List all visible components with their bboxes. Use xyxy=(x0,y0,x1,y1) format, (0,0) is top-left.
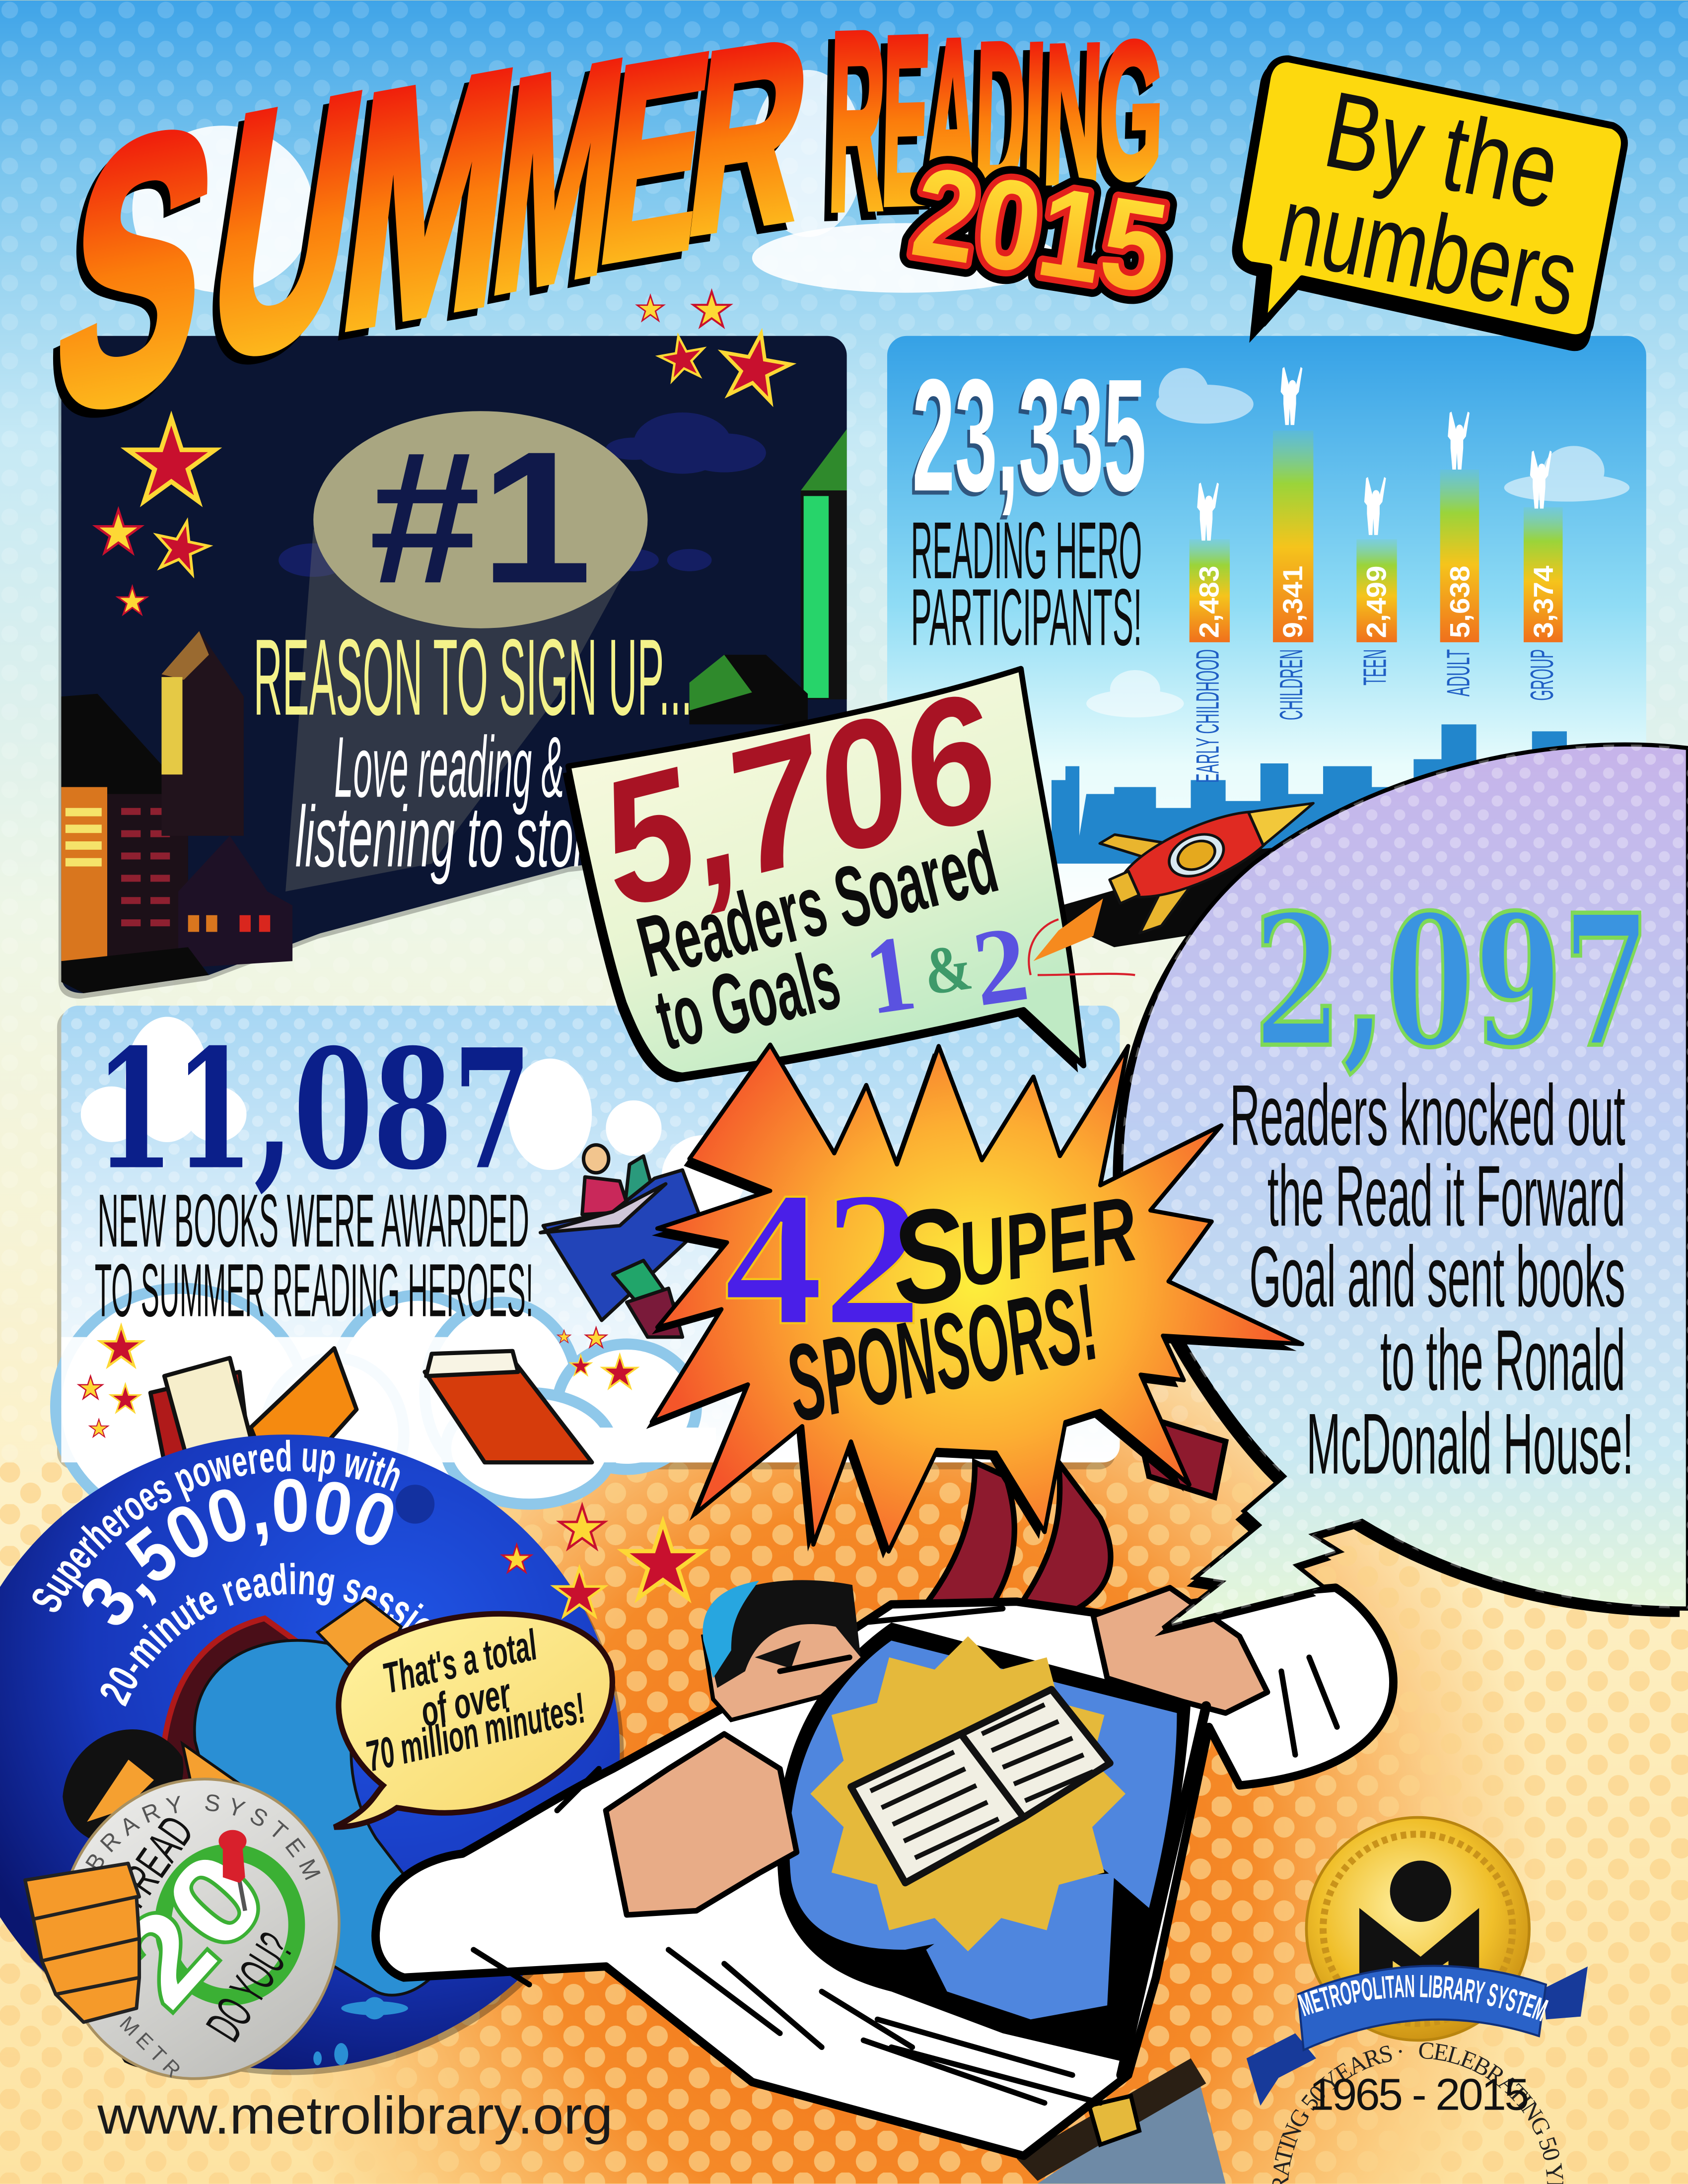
text: love reading xyxy=(295,719,643,885)
title: 2015: 2015 xyxy=(904,139,1177,320)
text: super xyxy=(882,1177,1143,1334)
stars xyxy=(502,1505,703,1616)
stat: 5,706: 5,706 xyxy=(580,655,1015,945)
bar chart xyxy=(1190,367,1563,783)
badge: I read 20 xyxy=(70,1777,341,2086)
text: 1 and 2: 2 xyxy=(966,903,1035,1029)
bar: adult: 5,638 xyxy=(1444,566,1476,638)
title: summer reading: M xyxy=(327,0,531,400)
bar: group: 3,374 xyxy=(1528,566,1559,638)
skyline xyxy=(1052,724,1646,864)
text: I read: I READ xyxy=(105,1807,204,1917)
title: summer reading: I xyxy=(1021,0,1048,231)
title shadow: N xyxy=(1034,11,1098,234)
callout: 2,097 readers xyxy=(1113,745,1688,1637)
icon: pin xyxy=(218,1830,247,1911)
hair and face xyxy=(703,1580,863,1720)
panel: participants xyxy=(887,336,1646,947)
panel: participants: 23,335 xyxy=(912,346,1146,525)
shirt xyxy=(375,1588,1393,2156)
illustration: cape xyxy=(891,1414,1226,1643)
illustration: flying hero xyxy=(64,1599,453,2069)
text: by the: By the xyxy=(1316,68,1569,232)
title: summer reading: G xyxy=(1096,1,1167,220)
illustration: rocket xyxy=(1029,755,1334,975)
title shadow: R xyxy=(669,0,815,298)
caption: new books xyxy=(95,1179,533,1333)
text: 1 and 2: & xyxy=(919,930,977,1009)
bar: group: GROUP xyxy=(1524,649,1560,701)
panel: new books: NEW BOOKS WERE AWARDED xyxy=(97,1179,529,1263)
icon: flying book with heroes xyxy=(540,1145,703,1337)
stars above panel xyxy=(637,291,795,404)
text: library system: LIBRARY SYSTEM xyxy=(85,1794,321,1880)
text: sponsors: SPONSORS! xyxy=(776,1261,1108,1445)
text: to goals: to Goals xyxy=(647,930,848,1068)
text: readers soared: Readers Soared xyxy=(629,814,1006,996)
panel: number one reason xyxy=(59,336,847,999)
illustration: blue reading circle xyxy=(0,737,723,2086)
icon: open book xyxy=(851,1689,1110,1883)
bar: teen: 2,499 xyxy=(1360,566,1392,638)
bar: group xyxy=(1524,451,1563,701)
logo: metropolitan library medal xyxy=(1247,1818,1588,2184)
bar: adult xyxy=(1440,411,1479,696)
stat: 42: 42 xyxy=(724,1152,922,1365)
chest emblem xyxy=(781,1607,1154,1980)
title shadow: A xyxy=(915,0,975,255)
panel: participants: 23,335 xyxy=(910,350,1143,529)
title: summer reading: N xyxy=(1041,2,1105,225)
title shadow: E xyxy=(872,0,925,263)
title shadow: E xyxy=(581,2,715,330)
callout: 70 million minutes: That's a total xyxy=(378,1621,542,1703)
text: readers knocked out xyxy=(1230,1067,1634,1492)
icon: stack of books xyxy=(150,1348,592,1462)
text: 1965 - 2015: 1965 - 2015 xyxy=(1309,2070,1529,2120)
icon: fist xyxy=(25,1863,140,2022)
title: summer reading: S xyxy=(35,46,237,492)
bar: early childhood: EARLY CHILDHOOD xyxy=(1190,649,1226,783)
title shadow xyxy=(28,0,1160,501)
ring xyxy=(163,1852,297,1997)
callout: 70 million minutes: 70 million minutes! xyxy=(362,1684,590,1780)
panel: participants: PARTICIPANTS! xyxy=(911,573,1142,663)
panel: new books: TO SUMMER READING HEROES! xyxy=(95,1249,533,1333)
spotlight xyxy=(313,411,647,628)
title shadow: M xyxy=(473,2,631,366)
spotlight beam xyxy=(285,530,640,891)
title: 2015: 2015 xyxy=(904,139,1177,320)
illustration: superhero tearing shirt xyxy=(375,1580,1393,2184)
text: 1 and 2: 1 xyxy=(858,912,922,1037)
callout: 70 million minutes: of over xyxy=(416,1669,516,1736)
title: 2015: 2015 xyxy=(904,139,1177,320)
title: summer reading: U xyxy=(190,18,381,434)
stat: 23,335 xyxy=(910,346,1146,529)
bar: children xyxy=(1273,367,1313,720)
callout: 5,706 readers xyxy=(563,655,1084,1082)
bar: teen: TEEN xyxy=(1357,649,1393,685)
stat: 3,500,000: 3,500,000 xyxy=(82,1479,393,1625)
sky clouds xyxy=(1086,368,1629,717)
panel: new books xyxy=(56,1006,1120,1525)
bar: children: 9,341 xyxy=(1277,566,1308,638)
title: summer reading xyxy=(35,0,1167,492)
panel: participants: READING HERO xyxy=(911,506,1142,596)
bar: teen xyxy=(1356,477,1397,685)
text: super: UPER xyxy=(951,1177,1143,1306)
title: summer reading: M xyxy=(480,0,637,357)
text: superheroes powered up with: Superheroes powered up with xyxy=(33,1439,400,1612)
bar: children: CHILDREN xyxy=(1273,649,1309,720)
chest xyxy=(777,1623,1191,2061)
banner: METROPOLITAN LIBRARY SYSTEM xyxy=(1297,1975,1549,2021)
starburst: 42 super sponsors xyxy=(646,1045,1302,1559)
left hand xyxy=(606,1734,797,1915)
title shadow: I xyxy=(1014,8,1041,239)
text: REASON TO SIGN UP... xyxy=(254,617,692,738)
text: 20: 20 xyxy=(88,1826,292,2032)
heading: #1: #1 xyxy=(369,412,592,622)
text: love reading: listening to stories xyxy=(295,789,643,885)
pants and belt xyxy=(1017,2058,1226,2184)
right hand xyxy=(1093,1588,1267,1713)
clouds in panel xyxy=(56,1017,745,1525)
stat: 11,087: 11,087 xyxy=(95,1013,532,1206)
bar: adult: ADULT xyxy=(1441,649,1477,696)
text: do you: DO YOU? xyxy=(196,1924,304,2050)
stars xyxy=(78,1326,637,1437)
banner xyxy=(1247,1966,1588,2106)
buildings xyxy=(61,429,847,993)
text: love reading: Love reading & xyxy=(334,719,564,815)
night clouds xyxy=(279,412,766,577)
title: summer reading: E xyxy=(588,0,722,321)
caption: participants xyxy=(911,506,1142,663)
title shadow: D xyxy=(965,6,1022,247)
shirt folds xyxy=(474,1609,1337,2103)
title shadow: M xyxy=(320,7,524,409)
icon: planet xyxy=(313,1997,408,2065)
bar: early childhood: 2,483 xyxy=(1194,566,1225,638)
text: metropolitan: METR xyxy=(115,2012,189,2086)
callout: by the numbers xyxy=(1232,59,1625,351)
callout: 70 million minutes xyxy=(334,1614,612,1827)
title: summer reading: D xyxy=(972,0,1029,238)
text: super: S xyxy=(882,1178,975,1334)
text: 1 and 2 xyxy=(858,903,1035,1037)
title shadow: U xyxy=(183,26,374,442)
title shadow: G xyxy=(1089,9,1160,229)
title shadow: S xyxy=(28,54,230,501)
stars xyxy=(96,418,215,614)
text: website: www.metrolibrary.org xyxy=(97,2085,613,2145)
